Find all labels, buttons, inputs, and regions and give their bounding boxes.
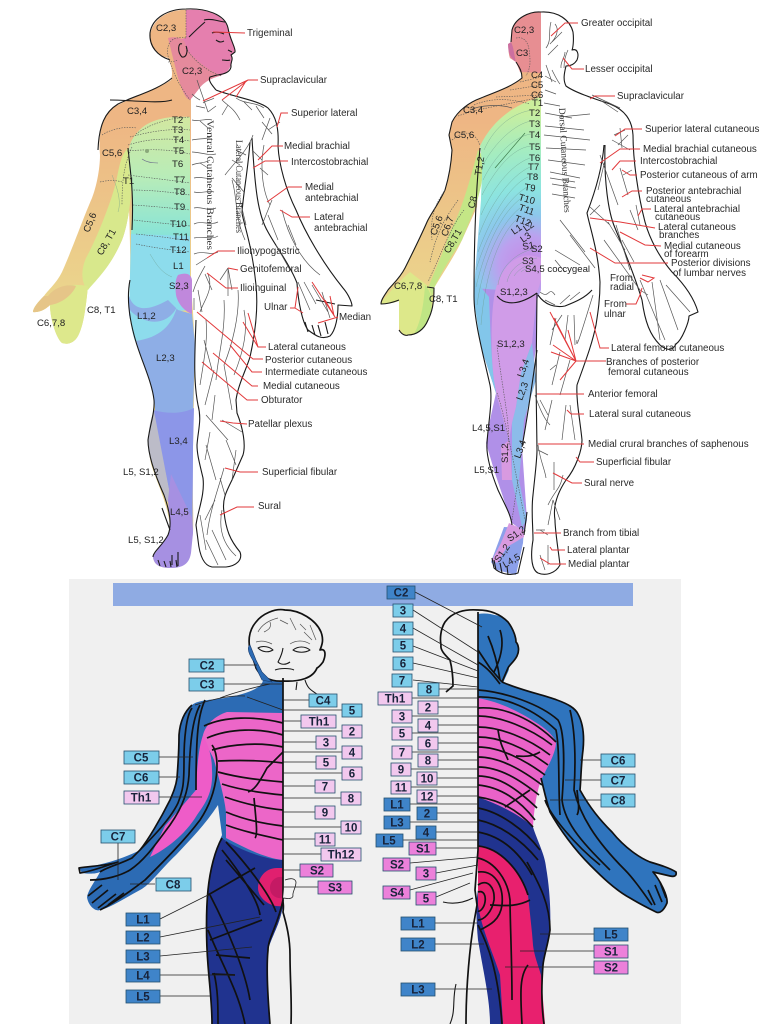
dermatome labels: anterior: T5 (173, 146, 184, 157)
labels: anterior dermatomes: S2 (310, 866, 324, 878)
dermatome labels: posterior: C3,4 (463, 105, 484, 116)
dermatome labels: posterior: C8,T1 (442, 227, 465, 256)
labels: anterior dermatomes: S3 (328, 882, 342, 894)
labels: anterior dermatomes: 10 (345, 822, 357, 834)
dermatome labels: posterior: T3 (529, 119, 540, 130)
dermatome labels: posterior: C3 (516, 48, 528, 59)
nerve labels: posterior: Branch from tibial (563, 528, 639, 539)
outline: posterior figure (381, 12, 698, 575)
nerve labels: anterior: Posterior cutaneous (265, 355, 352, 366)
dermatome labels: posterior: L4,5,S1 (472, 423, 505, 434)
nerve labels: posterior: Medial brachial cutaneous (643, 144, 757, 155)
labels: posterior dermatomes: 3 (399, 712, 405, 724)
dermatome labels: posterior: C2,3 (514, 25, 534, 36)
panel: lower dermatome chart (69, 579, 681, 1024)
nerve labels: posterior: Branches of posterior (606, 357, 700, 368)
nerve labels: posterior: Lateral plantar (567, 545, 630, 556)
leader lines: posterior labels (402, 592, 601, 989)
labels: anterior dermatomes: L5 (136, 992, 150, 1004)
dermatome labels: anterior: C6,7,8 (37, 318, 65, 329)
dermatome labels: posterior: L5,S1 (474, 465, 499, 476)
labels: posterior dermatomes: 3 (423, 868, 429, 880)
labels: anterior dermatomes: 5 (349, 706, 356, 718)
nerve labels: anterior: Iliohypogastric (237, 246, 300, 257)
nerve labels: anterior: Lateral (314, 212, 344, 223)
dermatome labels: anterior: T10 (170, 219, 187, 230)
dermatome labels: posterior: C6 (531, 90, 543, 101)
nerve labels: posterior: Lateral antebrachial (654, 204, 740, 215)
labels: anterior dermatomes: 11 (319, 834, 332, 846)
dermatome labels: anterior: L5, S1,2 (128, 535, 164, 546)
dermatome labels: anterior: T3 (172, 125, 183, 136)
labels: anterior dermatomes: 6 (349, 768, 355, 780)
labels: posterior dermatomes (376, 586, 635, 996)
nerve labels: posterior: ulnar (604, 309, 627, 320)
nerve labels: posterior: Posterior antebrachial (646, 186, 741, 197)
nerve labels: posterior: branches (659, 230, 699, 241)
dermatome labels: anterior: C8, T1 (95, 227, 119, 258)
dermatome labels: posterior: T8 (527, 172, 538, 183)
dermatome labels: anterior: L5, S1,2 (123, 467, 159, 478)
labels: anterior dermatomes: Th12 (328, 850, 354, 862)
labels: anterior dermatomes: C6 (134, 772, 148, 784)
labels: posterior dermatomes: 8 (425, 756, 432, 768)
labels: anterior dermatomes: C8 (166, 880, 181, 892)
labels: posterior dermatomes: C7 (611, 776, 625, 788)
dermatome labels: anterior: L3,4 (169, 436, 188, 447)
nerve labels: posterior: Posterior cutaneous of arm (640, 170, 758, 181)
labels: posterior dermatomes: 11 (395, 782, 408, 794)
figure: posterior body (476, 613, 676, 1024)
nerve labels: anterior: Sural (258, 501, 281, 512)
nerve labels: posterior: Posterior divisions (671, 258, 751, 269)
nerve labels: anterior: Intermediate cutaneous (265, 367, 367, 378)
dermatome labels: posterior: C8 (466, 195, 480, 210)
dermatome labels: posterior: S1,2,3 (497, 339, 525, 350)
nerve labels: posterior: Lateral sural cutaneous (589, 409, 691, 420)
dermatome labels: posterior: S1,2,3 (500, 287, 528, 298)
nerve labels: anterior: Medial (305, 182, 334, 193)
dermatome labels: anterior: L1,2 (137, 311, 156, 322)
nerve labels: posterior: radial (610, 282, 634, 293)
labels: anterior dermatomes: 9 (322, 808, 328, 820)
dermatome labels: posterior: S1,2 (492, 542, 513, 565)
labels: posterior dermatomes: L3 (390, 818, 404, 830)
dermatome labels: anterior: L1 (173, 261, 184, 272)
nerve branches: posterior (535, 22, 690, 570)
vertical label: dorsal cutaneous branches: Dorsal Cutaneous Branches (556, 108, 572, 213)
labels: posterior dermatomes: 5 (399, 728, 406, 740)
dermatome labels: anterior: L2,3 (156, 353, 175, 364)
labels: posterior dermatomes: C6 (611, 756, 625, 768)
dermatome labels: anterior: T6 (172, 159, 183, 170)
dermatome labels: anterior: C2,3 (156, 23, 176, 34)
dermatome labels: posterior: S1,2 (505, 524, 528, 544)
labels: posterior dermatomes: 5 (400, 640, 407, 652)
labels: posterior dermatomes: 10 (421, 774, 433, 786)
background panel (69, 579, 681, 1024)
dermatome labels: posterior: L2,3 (514, 381, 531, 402)
nerve labels: anterior: Superior lateral (291, 108, 357, 119)
labels: posterior dermatomes: 2 (425, 702, 431, 714)
labels: posterior dermatomes: L2 (411, 940, 425, 952)
posterior leg base (474, 288, 537, 532)
labels: posterior dermatomes: C2 (394, 588, 408, 600)
outline: anterior body (79, 610, 325, 1024)
nerve labels: posterior: Medial plantar (568, 559, 630, 570)
nerve labels: posterior: of lumbar nerves (673, 268, 746, 279)
dermatome labels: posterior: L1 (509, 222, 524, 237)
dermatome labels: posterior: S4,5 coccygeal (525, 264, 590, 275)
labels: posterior dermatomes: 7 (399, 748, 405, 760)
dermatome labels: anterior (37, 23, 202, 546)
labels: anterior dermatomes: L1 (136, 914, 150, 926)
nerve labels: posterior: of forearm (664, 249, 709, 260)
nerve labels: anterior: Genitofemoral (240, 264, 302, 275)
labels: posterior dermatomes: S2 (390, 860, 404, 872)
nerve labels: posterior: cutaneous (646, 194, 691, 205)
nerve labels: anterior: Patellar plexus (248, 419, 312, 430)
vertical labels: cutaneous branches (204, 120, 243, 250)
nerve labels: posterior: Intercostobrachial (640, 156, 717, 167)
dermatome labels: posterior: L3,4 (515, 357, 532, 379)
nerve labels: posterior: Superior lateral cutaneous (645, 124, 759, 135)
vertical labels: cutaneous branches: Ventral Cutaneous Branches (204, 120, 214, 250)
nerve labels: posterior: Lateral cutaneous (658, 222, 736, 233)
nerve labels: anterior: antebrachial (305, 193, 358, 204)
labels: anterior dermatomes: Th1 (131, 792, 152, 804)
dermatome labels: posterior (394, 25, 590, 571)
labels: anterior dermatomes: C3 (200, 680, 214, 692)
dermatome labels: anterior: T9 (174, 202, 185, 213)
labels: anterior dermatomes: L4 (136, 970, 150, 982)
outline: posterior body (440, 610, 676, 1024)
nerve labels: anterior: Ulnar (264, 302, 288, 313)
vertical labels: cutaneous branches: Lateral Cutaneous Branches (233, 140, 243, 233)
dermatome labels: posterior: C6,7 (439, 215, 457, 238)
dermatome labels: posterior: C5,6 (428, 214, 446, 237)
dermatome labels: posterior: T12 (513, 213, 532, 229)
nerve labels: anterior: Medial cutaneous (263, 381, 340, 392)
dermatome labels: anterior: T4 (173, 135, 185, 146)
labels: posterior dermatomes: C8 (611, 796, 626, 808)
nerve labels: posterior: Sural nerve (584, 478, 635, 489)
labels: posterior dermatomes: 4 (423, 828, 430, 840)
labels: anterior dermatomes: L3 (136, 952, 150, 964)
dermatome labels: posterior: C5,6 (454, 130, 474, 141)
dermatome labels: posterior: T1 (532, 98, 543, 109)
dermatome labels: posterior: T7 (528, 162, 539, 173)
nerve labels: posterior: Medial cutaneous (664, 241, 741, 252)
nerve labels: posterior: Medial crural branches of saphenous (588, 439, 749, 450)
labels: posterior dermatomes: L1 (411, 918, 425, 930)
nerve labels: posterior: cutaneous (655, 212, 700, 223)
labels: posterior dermatomes: S4 (390, 888, 405, 900)
nerve labels: posterior: From (604, 299, 627, 310)
dermatome labels: posterior: C6,7,8 (394, 281, 422, 292)
nerve labels: posterior: Greater occipital (581, 18, 652, 29)
dermatome labels: anterior: L4,5 (170, 507, 189, 518)
labels: anterior dermatomes: C2 (200, 660, 214, 672)
dermatome labels: posterior: T1,2 (473, 156, 487, 177)
labels: anterior dermatomes: 7 (322, 782, 328, 794)
dermatome labels: anterior: T8 (174, 187, 185, 198)
dermatome labels: posterior: T9 (524, 182, 536, 195)
nerve labels: posterior: Lesser occipital (585, 64, 653, 75)
dermatome labels: anterior: T2 (172, 115, 183, 126)
labels: posterior dermatomes: 2 (424, 808, 430, 820)
dermatome labels: anterior: T1 (123, 176, 134, 187)
dermatome labels: anterior: C3,4 (127, 106, 148, 117)
dermatome labels: posterior: S1 (522, 240, 535, 253)
nerve labels: anterior: Medial brachial (284, 141, 350, 152)
outline: anterior figure (98, 9, 352, 567)
dermatome labels: anterior: C8, T1 (87, 305, 116, 316)
nerve labels: posterior: femoral cutaneous (608, 367, 689, 378)
dermatome labels: posterior: C8, T1 (429, 294, 458, 305)
dermatome labels: posterior: T11 (517, 202, 536, 218)
labels: posterior dermatomes: 4 (400, 624, 407, 636)
labels: anterior dermatomes: C4 (316, 696, 331, 708)
panel: anterior dermatome and cutaneous nerve figure (33, 9, 371, 568)
labels: posterior dermatomes: L5 (382, 836, 396, 848)
labels: posterior dermatomes: L3 (411, 984, 425, 996)
dermatome labels: posterior: S1,2 (500, 443, 511, 463)
dermatome labels: posterior: L3,4 (512, 438, 529, 460)
labels: posterior dermatomes: L5 (604, 930, 618, 942)
nerve labels: anterior: Ilioinguinal (240, 283, 286, 294)
labels: posterior dermatomes: 3 (400, 606, 406, 618)
dermatome labels: anterior: C5,6 (102, 148, 122, 159)
labels: anterior dermatomes: 3 (323, 738, 329, 750)
figure: anterior body (79, 679, 283, 1024)
labels: posterior dermatomes: S1 (416, 844, 431, 856)
labels: anterior dermatomes: 4 (349, 748, 356, 760)
dermatome labels: anterior: C5,6 (82, 211, 99, 234)
labels: posterior dermatomes: 9 (398, 764, 404, 776)
dermatome labels: posterior: L4,5 (501, 552, 523, 571)
panel: posterior dermatome and cutaneous nerve figure (381, 12, 759, 575)
nerve branches: anterior (192, 80, 330, 565)
labels: anterior dermatomes (101, 659, 362, 1004)
dermatome labels: posterior: L2 (521, 219, 536, 234)
nerve labels: anterior: Intercostobrachial (291, 157, 368, 168)
nerve labels: posterior: Lateral femoral cutaneous (611, 343, 724, 354)
labels: posterior dermatomes: 6 (400, 658, 406, 670)
nerve labels: posterior: From (610, 273, 633, 284)
labels: posterior dermatomes: 7 (399, 676, 405, 688)
figure: anterior coloured dermatomes (33, 10, 235, 568)
labels: posterior dermatomes: 8 (426, 684, 433, 696)
labels: anterior dermatomes: 8 (348, 794, 355, 806)
labels: anterior dermatomes: C7 (111, 832, 125, 844)
figure: posterior coloured dermatomes (381, 12, 541, 575)
nerve labels: anterior: Obturator (261, 395, 303, 406)
labels: anterior dermatomes: L2 (136, 932, 150, 944)
dermatome labels: posterior: T5 (529, 142, 540, 153)
nerve labels: anterior: Trigeminal (247, 28, 292, 39)
nerve labels: posterior: Superficial fibular (596, 457, 672, 468)
labels: anterior dermatomes: C5 (134, 752, 149, 764)
labels: posterior dermatomes: S1 (604, 946, 619, 958)
red leader lines: anterior (197, 32, 338, 515)
dermatome labels: posterior: C5 (531, 80, 543, 91)
labels: anterior dermatomes: 5 (323, 758, 330, 770)
dermatome labels: anterior: C2,3 (182, 66, 202, 77)
labels: anterior dermatomes: 2 (349, 726, 355, 738)
dermatome labels: posterior: S3 (522, 256, 534, 267)
nerve labels: anterior: Supraclavicular (260, 75, 328, 86)
nerve labels: anterior: antebrachial (314, 223, 367, 234)
labels: posterior dermatomes: 12 (421, 792, 433, 804)
nerve labels: anterior: Median (339, 312, 371, 323)
labels: anterior dermatomes: Th1 (309, 716, 330, 728)
nerve labels: posterior: Supraclavicular (617, 91, 685, 102)
dermatome labels: anterior: T7 (174, 175, 185, 186)
nerve labels: anterior: Lateral cutaneous (268, 342, 346, 353)
dermatome labels: anterior: T12 (170, 245, 187, 256)
dermatome labels: posterior: S2 (531, 244, 543, 255)
nerve labels: anterior: Superficial fibular (262, 467, 338, 478)
nerve labels: anterior (237, 28, 371, 512)
red leader lines: posterior (534, 23, 668, 564)
dermatome labels: posterior: T10 (517, 192, 536, 207)
dermatome labels: posterior: T2 (529, 108, 540, 119)
labels: posterior dermatomes: Th1 (385, 694, 406, 706)
labels: posterior dermatomes: 4 (425, 720, 432, 732)
labels: posterior dermatomes: 6 (425, 738, 431, 750)
labels: posterior dermatomes: 5 (423, 894, 430, 906)
dermatome labels: anterior: T11 (173, 232, 189, 243)
dermatome labels: posterior: T6 (529, 153, 540, 164)
dermatome labels: anterior: S2,3 (169, 281, 189, 292)
labels: posterior dermatomes: L1 (390, 800, 404, 812)
nerve labels: posterior: Anterior femoral (588, 389, 658, 400)
nerve labels: posterior (563, 18, 759, 570)
dermatome labels: posterior: C4 (531, 70, 544, 81)
dermatome labels: posterior: L3 (518, 230, 533, 245)
blue title bar (113, 583, 633, 606)
leader lines: anterior labels (118, 665, 342, 996)
labels: posterior dermatomes: S2 (604, 962, 618, 974)
dermatome labels: posterior: T4 (529, 130, 541, 141)
